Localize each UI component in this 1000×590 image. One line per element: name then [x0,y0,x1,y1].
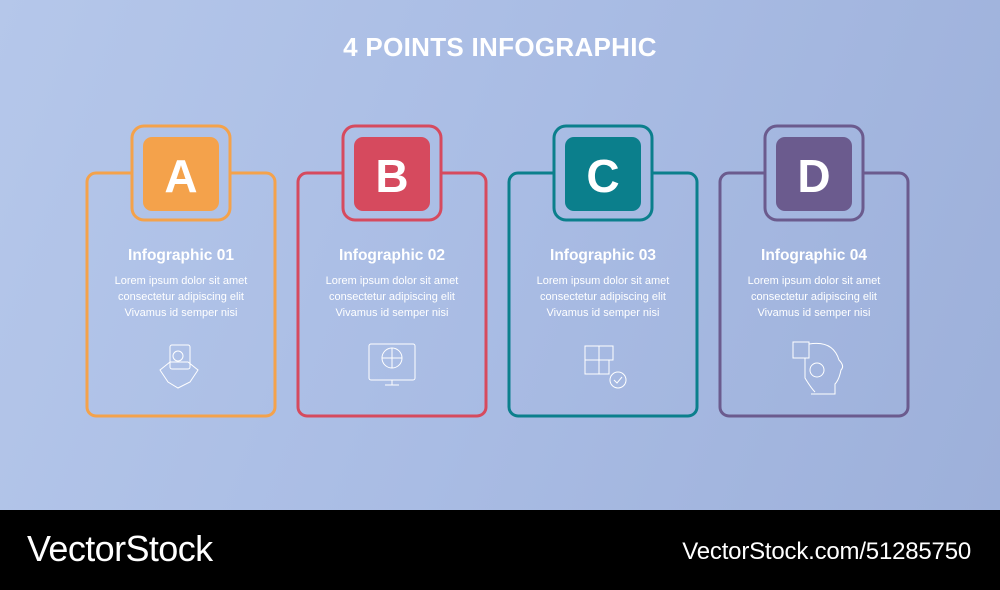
card D: consectetur adipiscing elit [751,291,877,303]
card B: Infographic 02 [339,247,445,264]
card B [298,126,486,416]
card B: Lorem ipsum dolor sit amet [326,275,458,287]
card C: consectetur adipiscing elit [540,291,666,303]
card C: Lorem ipsum dolor sit amet [537,275,669,287]
card A [87,126,275,416]
card C [509,126,697,416]
card B: B [375,150,409,202]
card D: Lorem ipsum dolor sit amet [748,275,880,287]
title: 4 POINTS INFOGRAPHIC [343,32,657,62]
footer url: VectorStock.com/51285750 [682,538,971,565]
card D: Vivamus id semper nisi [758,307,870,319]
footer brand: VectorStock [27,528,212,569]
card C: C [586,150,620,202]
card B: consectetur adipiscing elit [329,291,455,303]
card A: A [164,150,198,202]
card D: D [797,150,831,202]
card C: Vivamus id semper nisi [547,307,659,319]
card A: Lorem ipsum dolor sit amet [115,275,247,287]
card D [720,126,908,416]
footer bar [0,510,1000,590]
card A: consectetur adipiscing elit [118,291,244,303]
card A: Infographic 01 [128,247,234,264]
card B: Vivamus id semper nisi [336,307,448,319]
card D: Infographic 04 [761,247,867,264]
card C: Infographic 03 [550,247,656,264]
card A: Vivamus id semper nisi [125,307,237,319]
